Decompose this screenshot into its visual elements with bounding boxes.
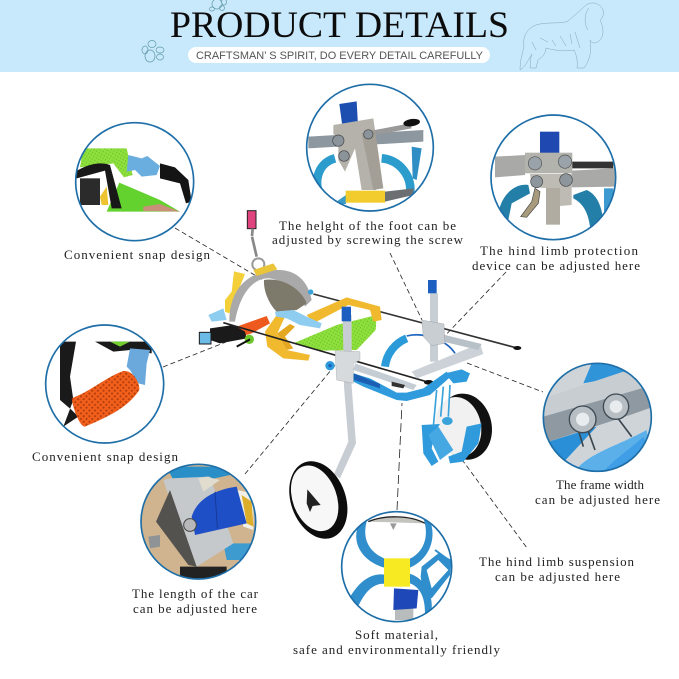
label: snap design top: Convenient snap design [64, 247, 210, 262]
upper rod [308, 289, 521, 350]
detail circle: foot height [307, 84, 433, 211]
green mesh seat [293, 315, 377, 351]
blue buckle straps [208, 308, 322, 328]
label: foot height: adjusted by screwing the screw [272, 232, 464, 247]
label: frame width: The frame width [556, 477, 644, 492]
orange and black straps [199, 316, 270, 347]
label: soft material: Soft material, [355, 627, 438, 642]
detail circle: hind limb protection [491, 115, 616, 240]
label: car length [132, 586, 259, 616]
leash [247, 211, 264, 270]
header banner [0, 0, 679, 72]
label: snap design left: Convenient snap design [32, 449, 178, 464]
label: hind limb suspension [479, 554, 634, 584]
rear frame [353, 335, 483, 390]
detail circle: snap design left [46, 325, 164, 443]
front wheel [279, 453, 358, 547]
hind limb stirrups [422, 369, 482, 466]
title: PRODUCT DETAILS [170, 5, 509, 46]
blue tube [353, 372, 451, 401]
front post and bracket [325, 307, 360, 478]
icon: paw print left [142, 40, 164, 62]
blue arc padding [385, 335, 455, 367]
detail circle: car length [141, 464, 257, 580]
detail circle: frame width [540, 363, 653, 477]
chest support [229, 263, 312, 322]
label: hind limb suspension: The hind limb suspension [479, 554, 634, 569]
detail circle: soft material [342, 512, 453, 622]
label: hind limb suspension: can be adjusted here [495, 569, 620, 584]
icon: paw print top [210, 0, 226, 11]
label: hind limb protection: The hind limb protection [480, 243, 638, 258]
detail circle: snap design top [75, 123, 194, 241]
label: hind limb protection: device can be adjusted here [472, 258, 640, 273]
label: soft material [293, 627, 500, 657]
wheelchair product [199, 211, 521, 547]
yellow tail strap [225, 271, 245, 313]
subtitle pill: CRAFTSMAN’ S SPIRIT, DO EVERY DETAIL CAREFULLY [196, 50, 484, 62]
label: frame width: can be adjusted here [535, 492, 660, 507]
label: foot height [272, 218, 464, 247]
lower rod [223, 323, 433, 385]
label: car length: The length of the car [132, 586, 259, 601]
label: foot height: The helght of the foot can be [279, 218, 456, 233]
leader lines [163, 228, 543, 548]
rear wheel [430, 389, 498, 465]
label: car length: can be adjusted here [133, 601, 257, 616]
label: frame width [535, 477, 660, 507]
label: hind limb protection [472, 243, 640, 273]
icon: dog outline [520, 3, 603, 70]
label: soft material: safe and environmentally friendly [293, 642, 500, 657]
yellow harness [265, 297, 382, 361]
rear post [422, 280, 445, 362]
